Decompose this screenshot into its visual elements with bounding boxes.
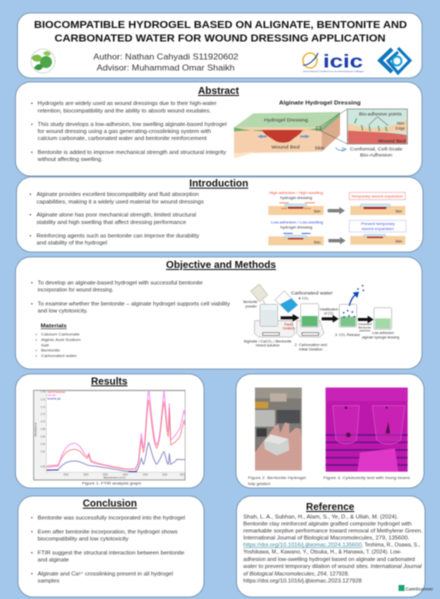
- diagram: adhesion comparison: hydrogel dressing: [280, 226, 312, 230]
- chart: FTIR graph: CaCO3 bentonite: [47, 391, 66, 394]
- title: BIOCOMPATIBLE HYDROGEL BASED ON ALIGNATE, BENTONITE AND: [34, 20, 407, 31]
- materials list: Salt: [41, 342, 50, 347]
- introduction text: and stability of the hydrogel: [36, 241, 107, 247]
- diagram: alginate hydrogel dressing: Skin: [397, 121, 404, 126]
- objectives text: To examine whether the bentonite – alginate hydrogel supports cell viability: [38, 301, 231, 307]
- title: CARBONATED WATER FOR WOUND DRESSING APPLICATION: [54, 34, 386, 44]
- chart: FTIR graph: 0.68: [41, 429, 46, 431]
- abstract text: [31, 101, 227, 163]
- reference text: [243, 514, 423, 584]
- abstract text: without affecting swelling.: [38, 157, 103, 163]
- chart: FTIR graph: 0.72: [41, 414, 46, 416]
- diagram: alginate hydrogel dressing: Wound Bed: [378, 138, 406, 143]
- diagram: preparation method: 3. CO₂ Release: [335, 333, 360, 337]
- diagram: alginate hydrogel dressing: Hydrogel Dressing: [264, 117, 309, 122]
- diagram: alginate hydrogel dressing: Alginate Hydrogel Dressing: [279, 101, 361, 107]
- diagram: preparation method: [243, 284, 399, 351]
- conclusion text: biocompatibility and low cytotoxicity: [38, 537, 129, 543]
- introduction text: capabilities, making it a widely used material for wound dressings: [36, 199, 204, 205]
- photo: cytotoxicity test: [326, 388, 408, 472]
- chart: FTIR graph: 3500: [63, 474, 69, 476]
- reference text: Yoshikawa, M., Kawano, Y., Otsuka, H., & Hanawa, T. (2024). Low-: [243, 550, 402, 556]
- heading: reference: Reference: [306, 502, 355, 513]
- chart: FTIR graph: 1000: [162, 474, 168, 476]
- captions: figures 2 and 3: Figure 2. Bentonite Hydrogel: [248, 475, 306, 480]
- diagram: preparation method: Integrated: [358, 322, 372, 326]
- abstract text: retention, biocompatibility and the ability to absorb wound exudates.: [38, 108, 211, 114]
- chart: FTIR graph: 2000: [123, 474, 129, 476]
- materials list: •: [36, 348, 38, 352]
- authors: [93, 52, 239, 72]
- diagram: alginate hydrogel dressing: Bio-Adhesion: [360, 153, 393, 158]
- panel: figures: [236, 374, 424, 488]
- diagram: preparation method: of CO₂: [324, 312, 335, 316]
- abstract text: •: [31, 150, 33, 156]
- diagram: preparation method: Rapid: [284, 323, 293, 327]
- heading: introduction: Introduction: [189, 179, 248, 190]
- chart: FTIR graph: 500: [180, 474, 185, 476]
- reference text: adhesion and low-swelling hydrogel based on alginate and carbonated: [243, 557, 415, 563]
- photo: bentonite hydrogel: [255, 388, 302, 470]
- materials list: Bentonite: [41, 348, 60, 352]
- objectives text: and low cytotoxicity.: [38, 308, 88, 314]
- chart: FTIR graph: [33, 390, 185, 480]
- icon: icic logo: International Conference on International Colleges: [303, 70, 364, 73]
- diagram: adhesion comparison: Skin: [314, 210, 320, 214]
- diagram: adhesion comparison: Low-adhesion / Low-swelling: [271, 221, 323, 225]
- icon: icic logo: icic: [323, 52, 363, 72]
- reference text: Bentonite clay reinforced alginate grafted composite hydrogel with: [243, 521, 412, 527]
- diagram: preparation method: alginate hydrogel dressing: [362, 335, 399, 339]
- reference text: https://doi.org/10.1016/j.ijbiomac.2024.135600: [243, 542, 362, 548]
- diagram: adhesion comparison: Skin: [395, 210, 402, 214]
- diagram: alginate hydrogel dressing: [234, 101, 407, 158]
- heading: abstract: Abstract: [198, 86, 240, 97]
- diagram: alginate hydrogel dressing: Skin: [315, 145, 325, 150]
- diagram: preparation method: CO₂: [302, 297, 309, 301]
- introduction text: Reinforcing agents such as bentonite can improve the durability: [36, 234, 200, 240]
- diagram: alginate hydrogel dressing: Edge: [396, 126, 406, 131]
- chart: FTIR graph: 1500: [143, 474, 149, 476]
- chart: FTIR graph: bentonite gel: [47, 397, 61, 400]
- introduction text: [30, 192, 204, 247]
- objectives text: •: [31, 280, 33, 286]
- introduction text: •: [30, 234, 32, 240]
- conclusion text: and alginate: [38, 557, 69, 563]
- diagram: adhesion comparison: hydrogel dressing: [280, 196, 312, 200]
- title: [34, 20, 407, 44]
- introduction text: Alginate provides excellent biocompatibility and fluid absorption: [36, 192, 199, 198]
- conclusion text: •: [31, 530, 33, 536]
- diagram: preparation method: 2. Carbonation and: [295, 343, 327, 347]
- chart: FTIR graph: 0.70: [41, 422, 46, 424]
- heading: objective and methods: Objective and Methods: [166, 260, 276, 271]
- panel: conclusion: [18, 496, 204, 597]
- reference text: , Teshima, R., Osawa, S.,: [362, 542, 420, 548]
- materials list: [36, 324, 81, 358]
- conclusion text: •: [31, 571, 33, 577]
- materials list: •: [36, 337, 38, 342]
- caption: figure 1: Figure 1. FTIR analysis graph: [82, 481, 141, 486]
- panel: abstract: [16, 82, 422, 176]
- authors: Author: Nathan Cahyadi S11920602: [93, 52, 239, 62]
- conclusion text: Bentonite was successfully incorporated into the hydrogel: [38, 516, 185, 522]
- chart: FTIR graph: 0.74: [41, 407, 46, 409]
- diagram: preparation method: Volatilization: [320, 307, 338, 311]
- heading: conclusion: Conclusion: [83, 499, 137, 510]
- diagram: preparation method: Initial Gelation: [299, 347, 323, 351]
- conclusion text: •: [31, 550, 33, 556]
- icon: globe logo: [31, 49, 55, 73]
- reference text: of Biological Macromolecules , 254, 127928.: [243, 571, 349, 577]
- abstract text: Hydrogels are widely used as wound dressings due to their high-water: [38, 101, 217, 107]
- diagram: adhesion comparison: Skin: [395, 240, 402, 244]
- diagram: preparation method: powder: [245, 304, 258, 308]
- icon: diamond logo: [380, 48, 410, 73]
- panel: title: [18, 13, 422, 78]
- chart: FTIR graph: pure gel: [47, 394, 56, 397]
- captions: figures 2 and 3: Figure 3. Cytotoxicity test with mung beans: [323, 475, 410, 480]
- abstract text: calcium carbonate, carbonated water and bentonite reinforcement: [38, 136, 207, 142]
- chart: FTIR graph: 0.64: [41, 444, 46, 446]
- chart: FTIR graph: 2500: [103, 474, 109, 476]
- diagram: preparation method: Gelation: [283, 327, 295, 331]
- objectives text: [31, 280, 231, 314]
- objectives text: To develop an alginate-based hydrogel with successful bentonite: [38, 280, 203, 286]
- panel: results: [16, 374, 204, 488]
- diagram: adhesion comparison: Prevent temporary: [361, 222, 395, 226]
- materials list: Calcium Carbonate: [41, 332, 80, 336]
- watermark: CamScanner: [398, 585, 433, 591]
- icon: icic logo: [303, 52, 364, 73]
- watermark: CamScanner: CamScanner: [406, 586, 433, 591]
- reference text: International Journal of Biological Macromolecules, 279, 135600.: [243, 535, 409, 541]
- reference text: water to prevent temporary dilation of wound sites. International Journal: [243, 564, 423, 570]
- reference text: remarkable sorptive performance toward removal of Methylene Green.: [243, 528, 423, 534]
- conclusion text: Alginate and Ca²⁺ crosslinking present in all hydrogel: [38, 571, 173, 577]
- diagram: preparation method: mixed solution: [256, 344, 280, 348]
- chart: FTIR graph: 0.76: [41, 400, 46, 402]
- abstract text: for wound dressing using a gas generating-crosslinking system with: [38, 129, 211, 135]
- conclusion text: samples: [38, 578, 60, 584]
- abstract text: Bentonite is added to improve mechanical strength and structural integrity: [38, 150, 227, 156]
- diagram: alginate hydrogel dressing: Bio-adhesive points: [359, 111, 402, 116]
- introduction text: stability and high swelling that affect dressing performance: [36, 220, 186, 226]
- diagram: adhesion comparison: [268, 191, 406, 245]
- materials list: •: [36, 332, 38, 336]
- panel: objective and methods: [16, 257, 422, 369]
- chart: FTIR graph: 0.78: [41, 391, 46, 393]
- introduction text: •: [30, 192, 32, 198]
- diagram: preparation method: Bentonite: [243, 300, 257, 304]
- captions: figures 2 and 3: fully gelated: [248, 481, 270, 486]
- materials list: Carbonated water: [41, 353, 78, 358]
- conclusion text: Even after bentonite incorporation, the hydrogel shows: [38, 530, 178, 536]
- chart: FTIR graph: Absorbance: [33, 422, 37, 437]
- authors: Advisor: Muhammad Omar Shaikh: [97, 62, 235, 72]
- objectives text: •: [31, 301, 33, 307]
- diagram: preparation method: Carbonated water: [291, 290, 333, 296]
- panel: introduction: [16, 177, 423, 252]
- diagram: preparation method: Low-adhesion: [372, 331, 394, 335]
- introduction text: Alginate alone has poor mechanical strength, limited structural: [36, 213, 196, 219]
- chart: FTIR graph: 0.58: [41, 466, 46, 468]
- chart: FTIR graph: 0.62: [41, 451, 46, 453]
- conclusion text: [31, 516, 185, 584]
- diagram: adhesion comparison: Temporary wound expansion: [351, 194, 403, 198]
- reference text: Shah, L. A., Subhan, H., Alam, S., Ye, D., & Ullah, M. (2024).: [243, 514, 398, 520]
- materials list: Materials: [41, 324, 67, 330]
- reference text: https://doi.org/10.1016/j.ijbiomac.2023.127928: [243, 578, 362, 584]
- diagram: alginate hydrogel dressing: Conformal, Cell-Scale: [350, 146, 403, 151]
- materials list: Alginic Acid Sodium: [41, 337, 81, 342]
- materials list: •: [36, 353, 38, 358]
- heading: results: Results: [91, 376, 128, 387]
- abstract text: This study develops a low-adhesion, low swelling alginate-based hydrogel: [38, 122, 227, 128]
- abstract text: •: [31, 122, 33, 128]
- diagram: preparation method: Alginate / CaCO₃ / Bentonite: [244, 340, 292, 344]
- diagram: adhesion comparison: wound expansion: [362, 227, 394, 231]
- diagram: adhesion comparison: Skin: [314, 240, 320, 244]
- chart: FTIR graph: 3000: [83, 474, 89, 476]
- panel: reference: [236, 496, 425, 597]
- chart: FTIR graph: 0.66: [41, 437, 46, 439]
- captions: figures 2 and 3: [248, 475, 410, 486]
- abstract text: •: [31, 101, 33, 107]
- introduction text: •: [30, 213, 32, 219]
- diagram: adhesion comparison: High-adhesion / High-swelling: [269, 191, 323, 195]
- diagram: alginate hydrogel dressing: Wound Bed: [271, 145, 300, 150]
- diagram: preparation method: Bentonite: [358, 325, 371, 329]
- conclusion text: FTIR suggest the structural interaction between bentonite: [38, 550, 185, 556]
- diagram: preparation method: particles: [359, 329, 371, 333]
- objectives text: incorporation for wound dressing.: [38, 288, 113, 294]
- chart: FTIR graph: Wavenumbers (cm-1): [103, 476, 125, 480]
- conclusion text: •: [31, 516, 33, 522]
